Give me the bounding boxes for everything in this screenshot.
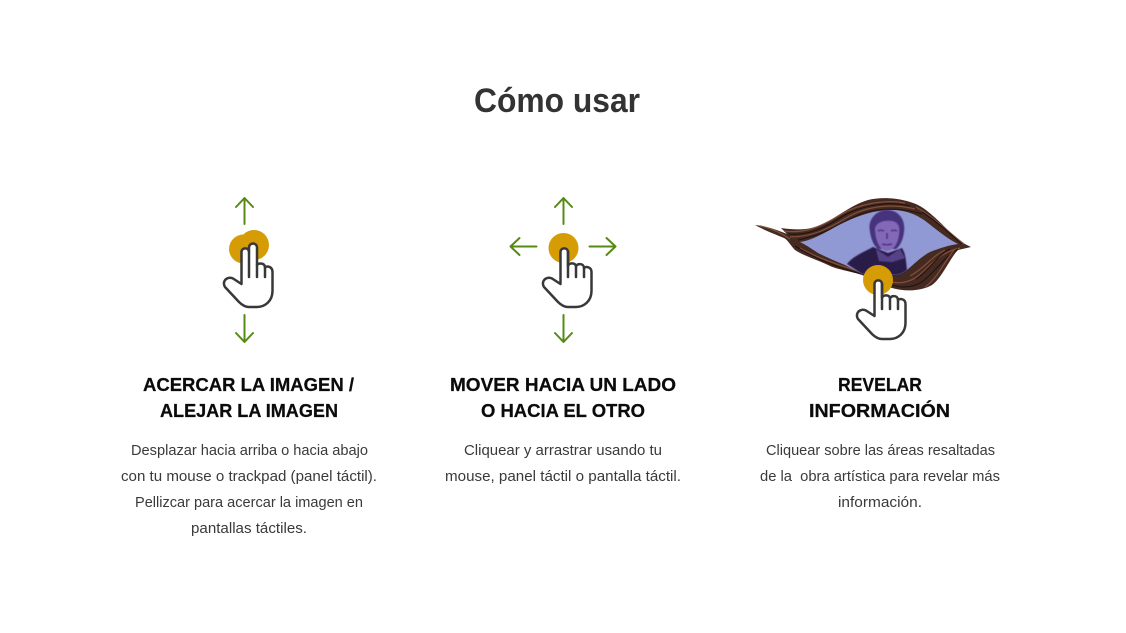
heading: zoom: ALEJAR LA IMAGEN (160, 401, 338, 421)
description: zoom: Desplazar hacia arriba o hacia abajo (131, 442, 368, 459)
arrow: down (236, 315, 253, 342)
heading: reveal: REVELAR (838, 375, 922, 395)
title: Cómo usar (474, 82, 640, 120)
heading: pan: MOVER HACIA UN LADO (450, 375, 676, 395)
heading: reveal: INFORMACIÓN (809, 400, 950, 421)
description: zoom: pantallas táctiles. (191, 520, 307, 537)
description: reveal (760, 442, 1000, 511)
heading: pan: O HACIA EL OTRO (481, 401, 645, 421)
icon: reveal gesture (755, 198, 971, 339)
hand (857, 280, 906, 339)
lavender background (800, 210, 958, 275)
portrait: facial features (878, 230, 897, 245)
description: zoom: con tu mouse o trackpad (panel táctil). (121, 468, 377, 485)
description: zoom (121, 442, 377, 537)
arrow: up (236, 198, 253, 224)
hair strands (760, 202, 964, 287)
touch points (229, 230, 269, 264)
description: pan: mouse, panel táctil o pantalla táctil. (445, 468, 681, 485)
description: pan (445, 442, 681, 485)
portrait: collar and bow tie (876, 249, 905, 262)
description: reveal: de la obra artística para revelar más (760, 468, 1000, 485)
panel: pan (445, 198, 681, 485)
artwork: almond-shaped opening with portrait (755, 198, 971, 290)
arrow: down (555, 315, 572, 342)
portrait (847, 210, 907, 275)
icon: pan gesture (510, 198, 616, 342)
touch point (863, 265, 893, 295)
heading: pan (450, 375, 676, 421)
touch point (548, 233, 578, 263)
icon: zoom gesture (224, 198, 272, 342)
panel: reveal information (755, 198, 1000, 511)
heading: zoom (143, 375, 354, 421)
description: pan: Cliquear y arrastrar usando tu (464, 442, 662, 459)
portrait: face (875, 221, 899, 251)
arrow: left (510, 238, 536, 255)
portrait: hair (869, 210, 904, 249)
arrow: up (555, 198, 572, 224)
heading: zoom: ACERCAR LA IMAGEN / (143, 375, 354, 395)
hand with two fingers (224, 244, 272, 307)
description: reveal: Cliquear sobre las áreas resaltadas (766, 442, 995, 459)
portrait: jacket (847, 247, 907, 275)
hand (543, 248, 592, 307)
description: zoom: Pellizcar para acercar la imagen en (135, 494, 363, 511)
arrow: right (590, 238, 616, 255)
brown hair frame (755, 198, 971, 290)
heading: reveal (809, 375, 950, 421)
description: reveal: información. (838, 494, 922, 511)
panel: zoom in and out (121, 198, 377, 537)
